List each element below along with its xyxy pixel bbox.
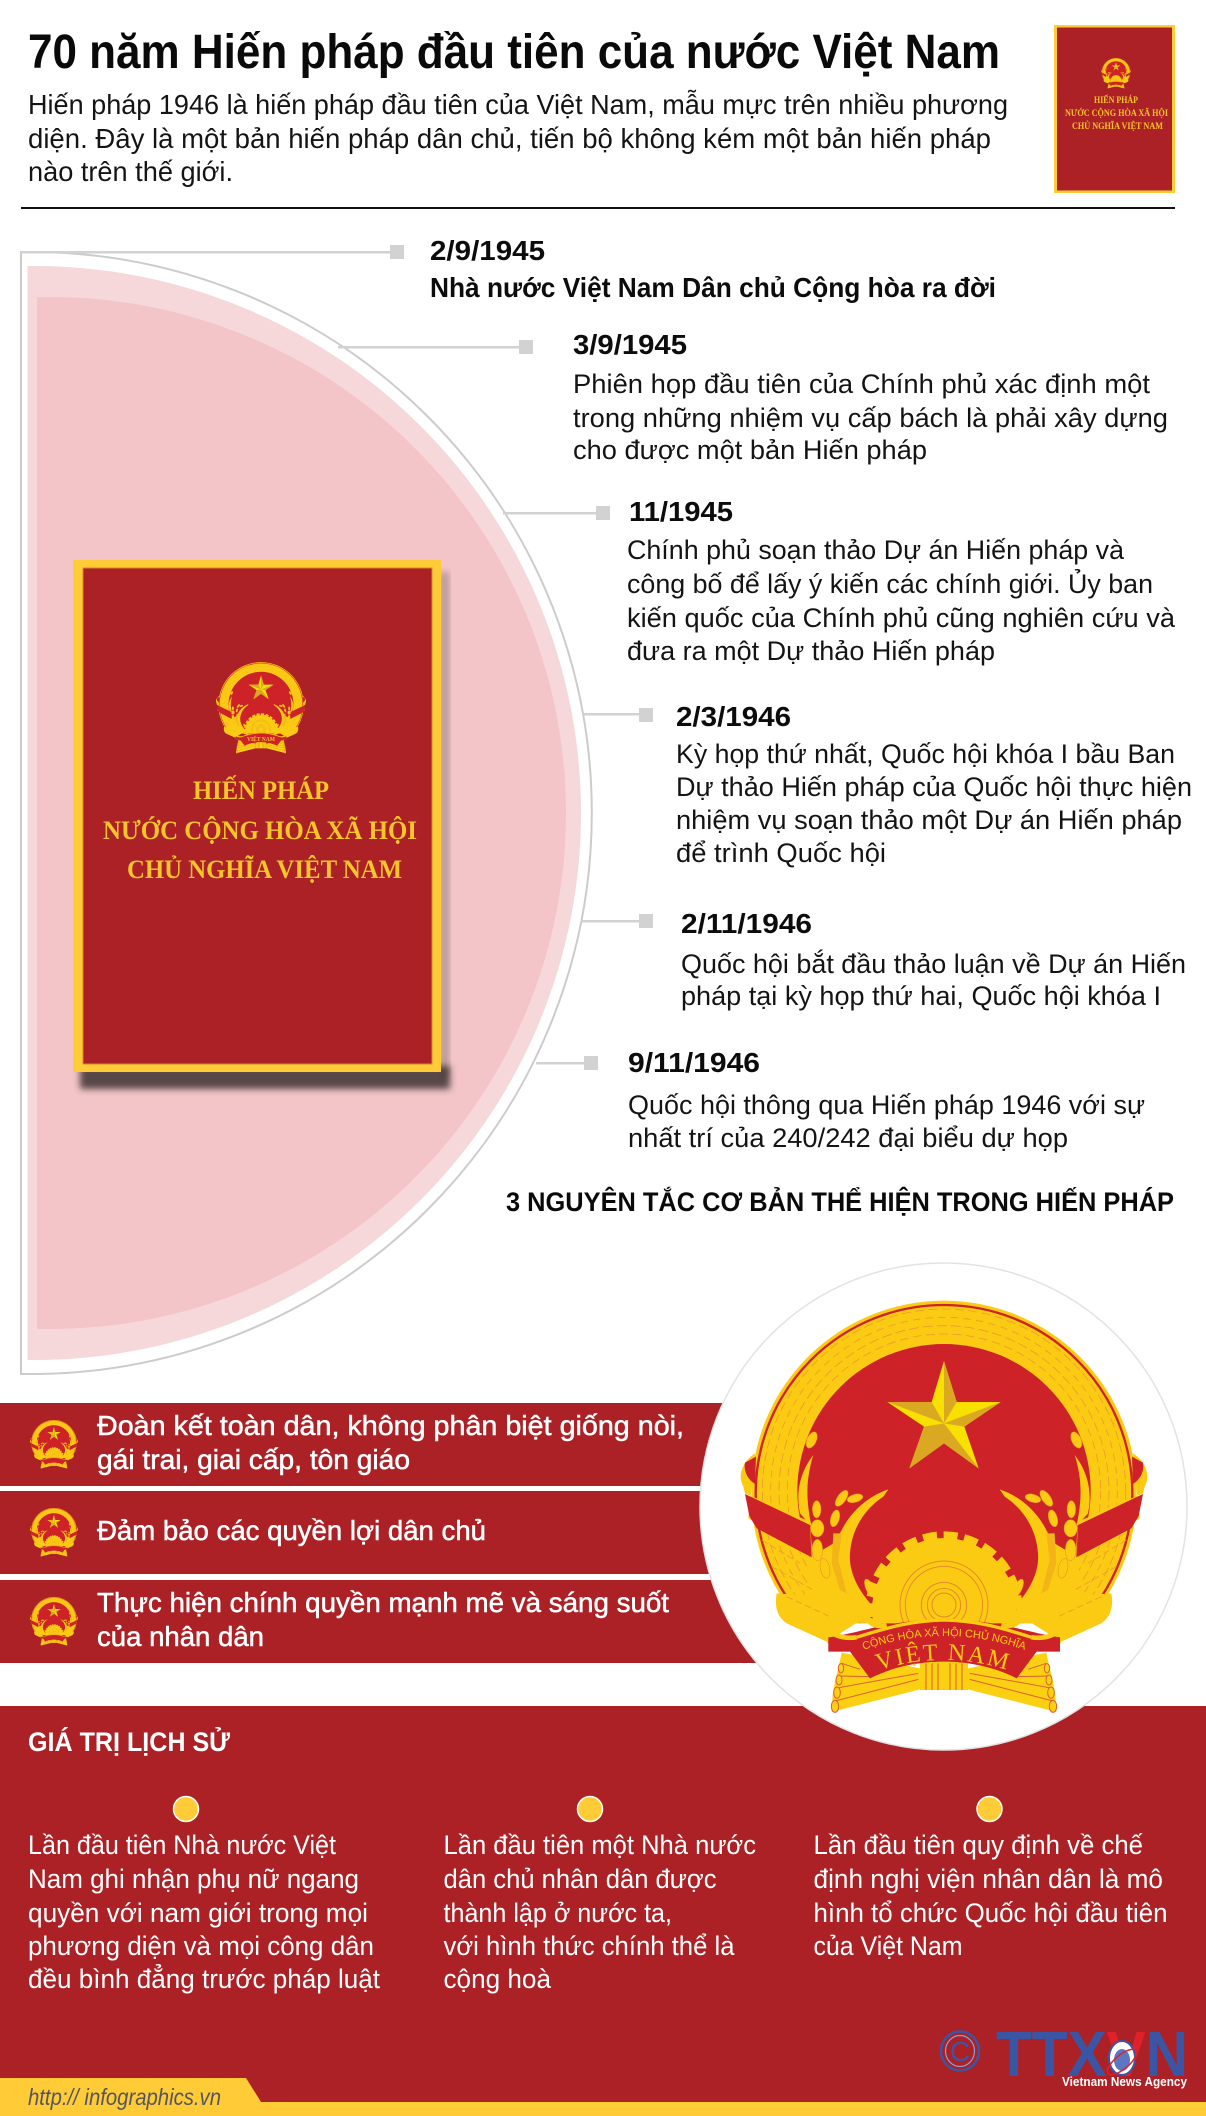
value column 3: hình tổ chức Quốc hội đầu tiên [814, 1898, 1168, 1928]
value column 1: đều bình đẳng trước pháp luật [28, 1964, 381, 1994]
value column 2: thành lập ở nước ta, [444, 1898, 672, 1928]
timeline entry 2/11/1946: Quốc hội bắt đầu thảo luận về Dự án Hiến [681, 949, 1186, 979]
header intro text: Hiến pháp 1946 là hiến pháp đầu tiên của Việt Nam, mẫu mực trên nhiều phương [28, 89, 1008, 120]
timeline entry 2/11/1946: pháp tại kỳ họp thứ hai, Quốc hội khóa I [681, 981, 1161, 1011]
timeline entry 2/9/1945 [430, 235, 996, 303]
timeline entry 2/3/1946: 2/3/1946 [676, 701, 791, 732]
principle bar 3 [0, 1580, 780, 1663]
header intro text: nào trên thế giới. [28, 156, 233, 187]
timeline entry 11/1945 [627, 496, 1175, 666]
small constitution book: CHỦ NGHĨA VIỆT NAM [1072, 121, 1163, 131]
small constitution book: HIẾN PHÁP [1094, 95, 1138, 105]
timeline entry 11/1945: Chính phủ soạn thảo Dự án Hiến pháp và [627, 535, 1124, 565]
timeline entry 2/11/1946: 2/11/1946 [681, 908, 812, 939]
value column 1: phương diện và mọi công dân [28, 1931, 374, 1961]
footer band with url [0, 2078, 1206, 2116]
timeline entry 11/1945: đưa ra một Dự thảo Hiến pháp [627, 636, 995, 666]
principle bar 3: Thực hiện chính quyền mạnh mẽ và sáng suốt [97, 1587, 669, 1618]
timeline entry 3/9/1945: 3/9/1945 [573, 329, 687, 360]
value column 2: cộng hoà [444, 1964, 551, 1994]
timeline entry 2/9/1945: 2/9/1945 [430, 235, 545, 266]
value column 3 [814, 1796, 1168, 1961]
large constitution book: VIỆT NAM [247, 735, 275, 743]
principle bar 3: của nhân dân [97, 1621, 264, 1652]
national emblem medallion: VIỆT NAM [874, 1642, 1010, 1670]
timeline entry 2/9/1945: Nhà nước Việt Nam Dân chủ Cộng hòa ra đời [430, 272, 996, 303]
historical value heading: GIÁ TRỊ LỊCH SỬ [28, 1725, 231, 1757]
timeline entry 2/3/1946: Kỳ họp thứ nhất, Quốc hội khóa I bầu Ban [676, 739, 1175, 769]
timeline entry 11/1945: công bố để lấy ý kiến các chính giới. Ủy ban [627, 569, 1153, 599]
timeline entry 9/11/1946: Quốc hội thông qua Hiến pháp 1946 với sự [628, 1090, 1145, 1120]
timeline entry 11/1945: kiến quốc của Chính phủ cũng nghiên cứu và [627, 603, 1175, 633]
timeline entry 3/9/1945 [573, 329, 1168, 465]
timeline entry 2/3/1946: Dự thảo Hiến pháp của Quốc hội thực hiện [676, 772, 1192, 802]
principles heading: 3 NGUYÊN TẮC CƠ BẢN THỂ HIỆN TRONG HIẾN PHÁP [506, 1185, 1174, 1217]
timeline entry 9/11/1946: 9/11/1946 [628, 1047, 760, 1078]
timeline connectors [21, 245, 653, 1070]
timeline entry 3/9/1945: trong những nhiệm vụ cấp bách là phải xây dựng [573, 403, 1168, 433]
small constitution book [1054, 25, 1175, 193]
principle bar 2 [0, 1491, 780, 1574]
value column 1: quyền với nam giới trong mọi [28, 1898, 368, 1928]
timeline entry 2/3/1946: nhiệm vụ soạn thảo một Dự án Hiến pháp [676, 805, 1182, 835]
header intro text [28, 89, 1008, 187]
principle bar 1: gái trai, giai cấp, tôn giáo [97, 1444, 410, 1475]
timeline entry 9/11/1946: nhất trí của 240/242 đại biểu dự họp [628, 1123, 1068, 1153]
large constitution book: HIẾN PHÁP [193, 776, 329, 805]
value column 3: Lần đầu tiên quy định về chế [814, 1830, 1143, 1860]
national emblem medallion [699, 1262, 1188, 1751]
principle bar 2: Đảm bảo các quyền lợi dân chủ [97, 1515, 486, 1546]
value column 1: Nam ghi nhận phụ nữ ngang [28, 1864, 359, 1894]
value column 1 [28, 1796, 381, 1994]
timeline entry 2/3/1946 [676, 701, 1192, 868]
header intro text: diện. Đây là một bản hiến pháp dân chủ, tiến bộ không kém một bản hiến pháp [28, 123, 991, 154]
semicircle backdrop [21, 252, 592, 1374]
value column 2: dân chủ nhân dân được [444, 1864, 716, 1894]
value column 2 [444, 1796, 756, 1994]
value column 1: Lần đầu tiên Nhà nước Việt [28, 1830, 337, 1860]
footer band with url: http:// infographics.vn [28, 2084, 221, 2110]
logo: TTXVN: C [950, 2036, 970, 2067]
large constitution book [73, 560, 450, 1089]
national emblem medallion: CỘNG HÒA XÃ HỘI CHỦ NGHĨA [862, 1626, 1025, 1650]
large constitution book: NƯỚC CỘNG HÒA XÃ HỘI [103, 816, 417, 845]
principle bar 1: Đoàn kết toàn dân, không phân biệt giống nòi, [97, 1410, 684, 1441]
header title: 70 năm Hiến pháp đầu tiên của nước Việt Nam [28, 26, 1000, 79]
value column 2: Lần đầu tiên một Nhà nước [444, 1830, 756, 1860]
principle bar 1 [0, 1403, 780, 1486]
panel: historical value [0, 1706, 1206, 2102]
timeline entry 3/9/1945: Phiên họp đầu tiên của Chính phủ xác định một [573, 369, 1151, 399]
timeline entry 2/3/1946: để trình Quốc hội [676, 838, 886, 868]
large constitution book: CHỦ NGHĨA VIỆT NAM [127, 855, 402, 884]
timeline entry 3/9/1945: cho được một bản Hiến pháp [573, 435, 927, 465]
timeline entry 11/1945: 11/1945 [629, 496, 733, 527]
timeline entry 9/11/1946 [628, 1047, 1145, 1153]
value column 3: định nghị viện nhân dân là mô [814, 1864, 1163, 1894]
value column 3: của Việt Nam [814, 1931, 962, 1961]
logo: TTXVN: TTXVN [996, 2018, 1188, 2090]
value column 2: với hình thức chính thể là [444, 1931, 735, 1961]
timeline entry 2/11/1946 [681, 908, 1186, 1011]
small constitution book: NƯỚC CỘNG HÒA XÃ HỘI [1065, 108, 1168, 118]
logo: TTXVN: Vietnam News Agency [1062, 2074, 1188, 2089]
